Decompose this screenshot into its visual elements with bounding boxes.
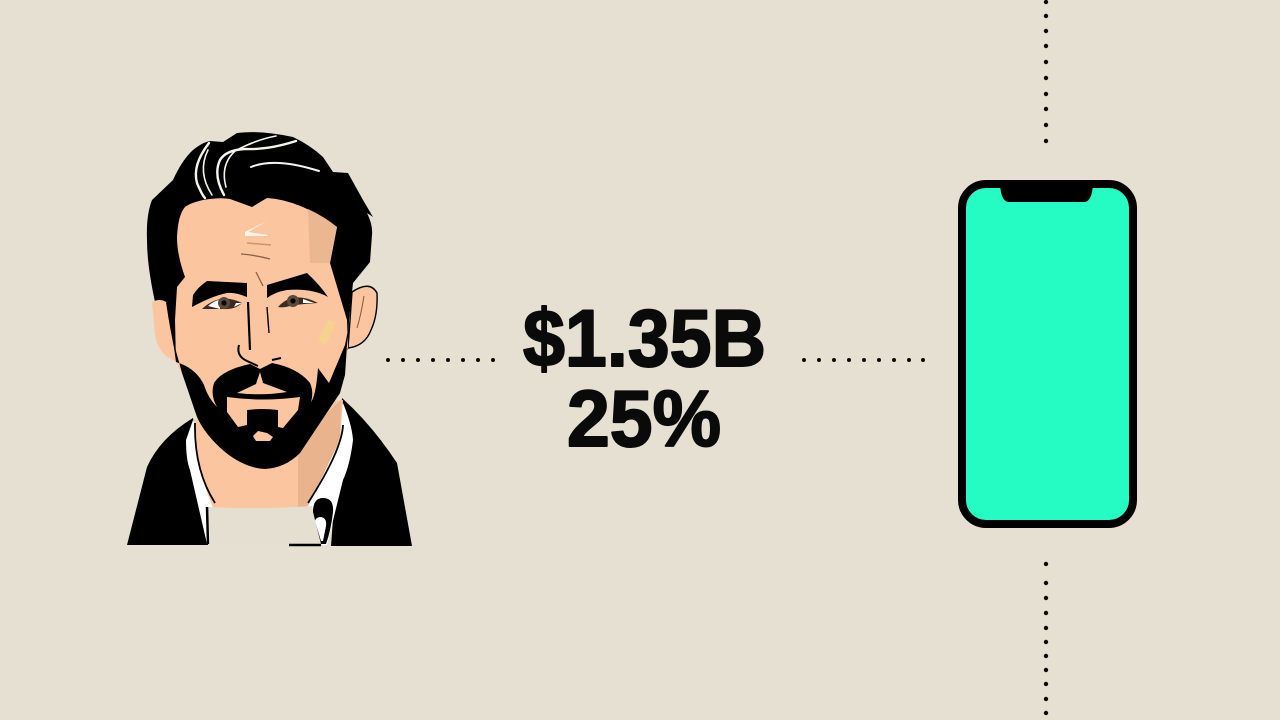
hair [147, 132, 373, 362]
chin skin [227, 397, 300, 428]
philtrum highlight [237, 372, 287, 394]
nose lines [248, 302, 250, 350]
dotted line: vertical top [1044, 0, 1048, 143]
left ear [152, 300, 177, 362]
microphone [313, 498, 333, 544]
eyebrows [192, 273, 328, 307]
dotted connector: portrait to value [386, 358, 495, 362]
dotted line: vertical bottom [1044, 562, 1048, 715]
beard and moustache [173, 330, 348, 469]
icon: smartphone [962, 184, 1133, 524]
jacket [127, 398, 412, 546]
value: percent: 25% [567, 374, 721, 463]
cheek highlight [318, 320, 336, 345]
lower patch [208, 506, 322, 545]
soul patch highlight [253, 431, 273, 441]
dotted connector: value to phone [802, 358, 925, 362]
eyes [202, 299, 242, 309]
forehead shading [308, 209, 337, 263]
illustration: bearded man portrait [127, 132, 412, 546]
forehead marks [245, 221, 268, 236]
neck [195, 400, 343, 508]
value: amount: $1.35B [523, 294, 766, 384]
shirt collar [186, 403, 353, 545]
hair highlights [196, 136, 319, 198]
right ear [348, 286, 377, 348]
face [175, 198, 348, 460]
